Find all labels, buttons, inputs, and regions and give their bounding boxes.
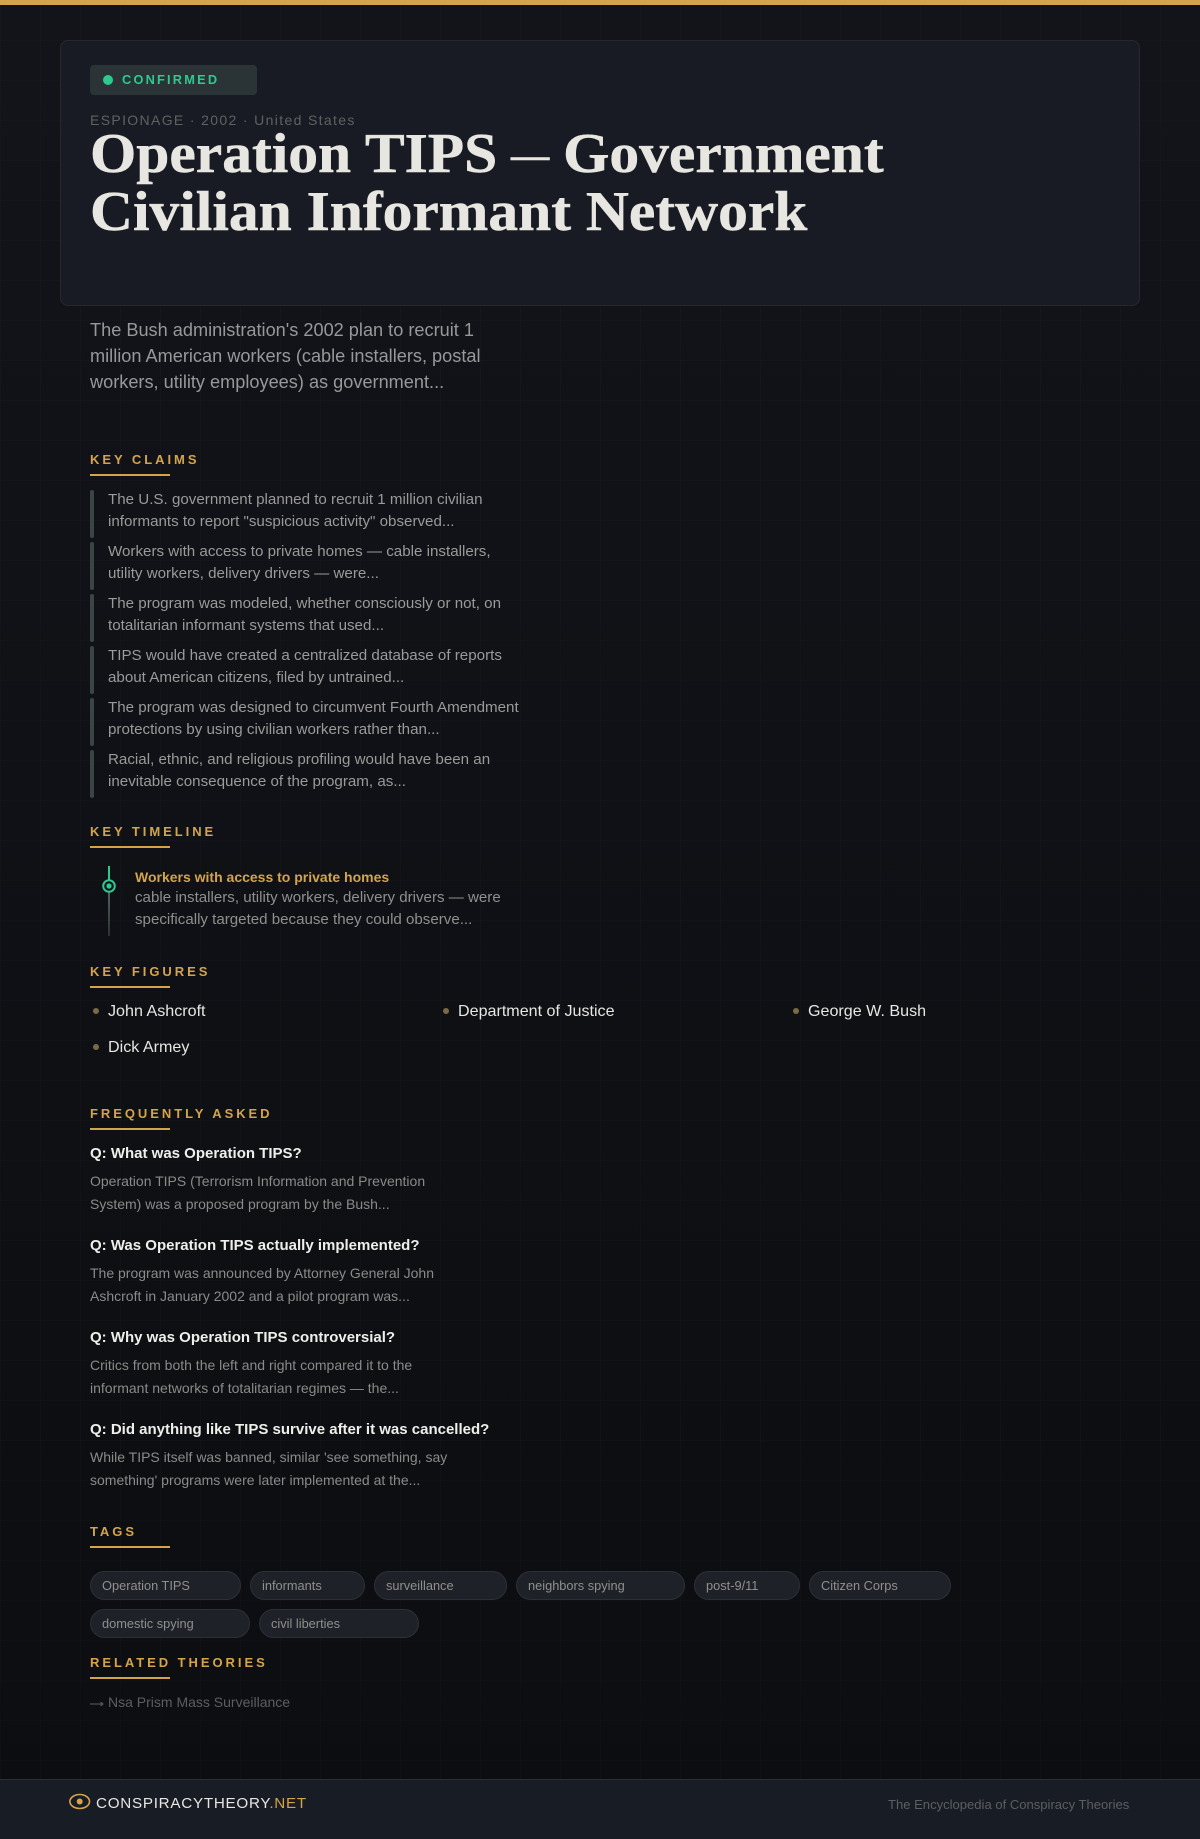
claim 5: protections by using civilian workers rather than...: [108, 721, 440, 738]
panel: header card: [60, 40, 1140, 306]
FAQ 2: Ashcroft in January 2002 and a pilot program was...: [90, 1288, 410, 1304]
title: Civilian Informant Network: [90, 181, 807, 243]
FAQ 4: something' programs were later implemented at the...: [90, 1472, 420, 1488]
related theory title: Nsa Prism Mass Surveillance: [108, 1694, 290, 1710]
claim 2: Workers with access to private homes — cable installers,: [108, 543, 491, 560]
panel: key figures: [93, 1002, 926, 1056]
badge label: CONFIRMED: [122, 72, 219, 87]
FAQ 1: [90, 1145, 425, 1212]
panel: tags: [90, 1571, 951, 1638]
tag: [516, 1571, 685, 1600]
FAQ 4: [90, 1421, 489, 1488]
top accent bar: [0, 0, 1200, 5]
section heading: related theories: RELATED THEORIES: [90, 1655, 268, 1670]
FAQ 4: Q: Did anything like TIPS survive after it was cancelled?: [90, 1421, 489, 1438]
figure: Department of Justice: Department of Justice: [458, 1002, 615, 1020]
claim 2: utility workers, delivery drivers — were...: [108, 565, 379, 582]
status badge: confirmed: [90, 65, 257, 95]
claim 5: The program was designed to circumvent Fourth Amendment: [108, 699, 519, 716]
title: [90, 123, 884, 243]
claim 1: informants to report "suspicious activity" observed...: [108, 513, 455, 530]
FAQ 3: informant networks of totalitarian regimes — the...: [90, 1380, 399, 1396]
tag: Operation TIPS: [102, 1578, 190, 1593]
panel: FAQ list: [90, 1145, 489, 1488]
brand wordmark: CONSPIRACYTHEORY.NET: [96, 1795, 307, 1812]
icon: eye logo: [69, 1794, 90, 1810]
panel: key claims list: [90, 490, 519, 798]
claim 1: The U.S. government planned to recruit 1 million civilian: [108, 491, 482, 508]
category and year meta line: ESPIONAGE · 2002 · United States: [90, 112, 356, 128]
timeline entry text: [135, 889, 501, 928]
tag: [694, 1571, 800, 1600]
timeline entry text: specifically targeted because they could observe...: [135, 911, 472, 928]
FAQ 2: Q: Was Operation TIPS actually implemented?: [90, 1237, 420, 1254]
claim 4: about American citizens, filed by untrained...: [108, 669, 404, 686]
timeline entry: [135, 869, 501, 928]
FAQ 3: Q: Why was Operation TIPS controversial?: [90, 1329, 395, 1346]
intro description: million American workers (cable installers, postal: [90, 346, 481, 366]
timeline entry title: Workers with access to private homes: [135, 869, 389, 885]
figure: Dick Armey: Dick Armey: [108, 1038, 189, 1056]
claim 1: [90, 490, 482, 538]
footer bar: [0, 1779, 1200, 1839]
timeline marker: [102, 866, 116, 936]
FAQ 2: The program was announced by Attorney General John: [90, 1265, 434, 1281]
claim 6: Racial, ethnic, and religious profiling would have been an: [108, 751, 490, 768]
tag: Citizen Corps: [821, 1578, 898, 1593]
claim 3: [90, 594, 501, 642]
FAQ 3: [90, 1329, 412, 1396]
FAQ 4: While TIPS itself was banned, similar 'see something, say: [90, 1449, 447, 1465]
footer tagline: The Encyclopedia of Conspiracy Theories: [888, 1797, 1129, 1812]
FAQ 1: System) was a proposed program by the Bush...: [90, 1196, 390, 1212]
intro description: [90, 320, 481, 392]
tag: [90, 1609, 250, 1638]
tag: informants: [262, 1578, 322, 1593]
figure: John Ashcroft: John Ashcroft: [108, 1002, 206, 1020]
figure: George W. Bush: George W. Bush: [808, 1002, 926, 1020]
claim 3: The program was modeled, whether consciously or not, on: [108, 595, 501, 612]
tag: [250, 1571, 365, 1600]
timeline entry text: cable installers, utility workers, delivery drivers — were: [135, 889, 501, 906]
tag: neighbors spying: [528, 1578, 625, 1593]
tag: [374, 1571, 507, 1600]
tag: [259, 1609, 419, 1638]
tag: [90, 1571, 241, 1600]
FAQ 3: Critics from both the left and right compared it to the: [90, 1357, 412, 1373]
tag: civil liberties: [271, 1616, 340, 1631]
title: Operation TIPS — Government: [90, 123, 884, 185]
claim 3: totalitarian informant systems that used...: [108, 617, 384, 634]
intro description: The Bush administration's 2002 plan to recruit 1: [90, 320, 474, 340]
tag: [809, 1571, 951, 1600]
section heading: key figures: KEY FIGURES: [90, 964, 210, 979]
tag: domestic spying: [102, 1616, 194, 1631]
icon: status dot: [103, 75, 113, 85]
claim 6: [90, 750, 490, 798]
claim 4: [90, 646, 502, 694]
claim 2: [90, 542, 491, 590]
section heading: frequently asked: FREQUENTLY ASKED: [90, 1106, 273, 1121]
related theory link: [90, 1694, 290, 1710]
FAQ 2: [90, 1237, 434, 1304]
section heading: key claims: KEY CLAIMS: [90, 452, 199, 467]
section heading: key timeline: KEY TIMELINE: [90, 824, 216, 839]
claim 5: [90, 698, 519, 746]
claim 6: inevitable consequence of the program, as...: [108, 773, 406, 790]
claim 4: TIPS would have created a centralized database of reports: [108, 647, 502, 664]
tag: surveillance: [386, 1578, 454, 1593]
FAQ 1: Operation TIPS (Terrorism Information and Prevention: [90, 1173, 425, 1189]
icon: arrow: [90, 1702, 104, 1706]
FAQ 1: Q: What was Operation TIPS?: [90, 1145, 302, 1162]
section heading: tags: TAGS: [90, 1524, 137, 1539]
intro description: workers, utility employees) as government...: [90, 372, 444, 392]
tag: post-9/11: [706, 1578, 758, 1593]
